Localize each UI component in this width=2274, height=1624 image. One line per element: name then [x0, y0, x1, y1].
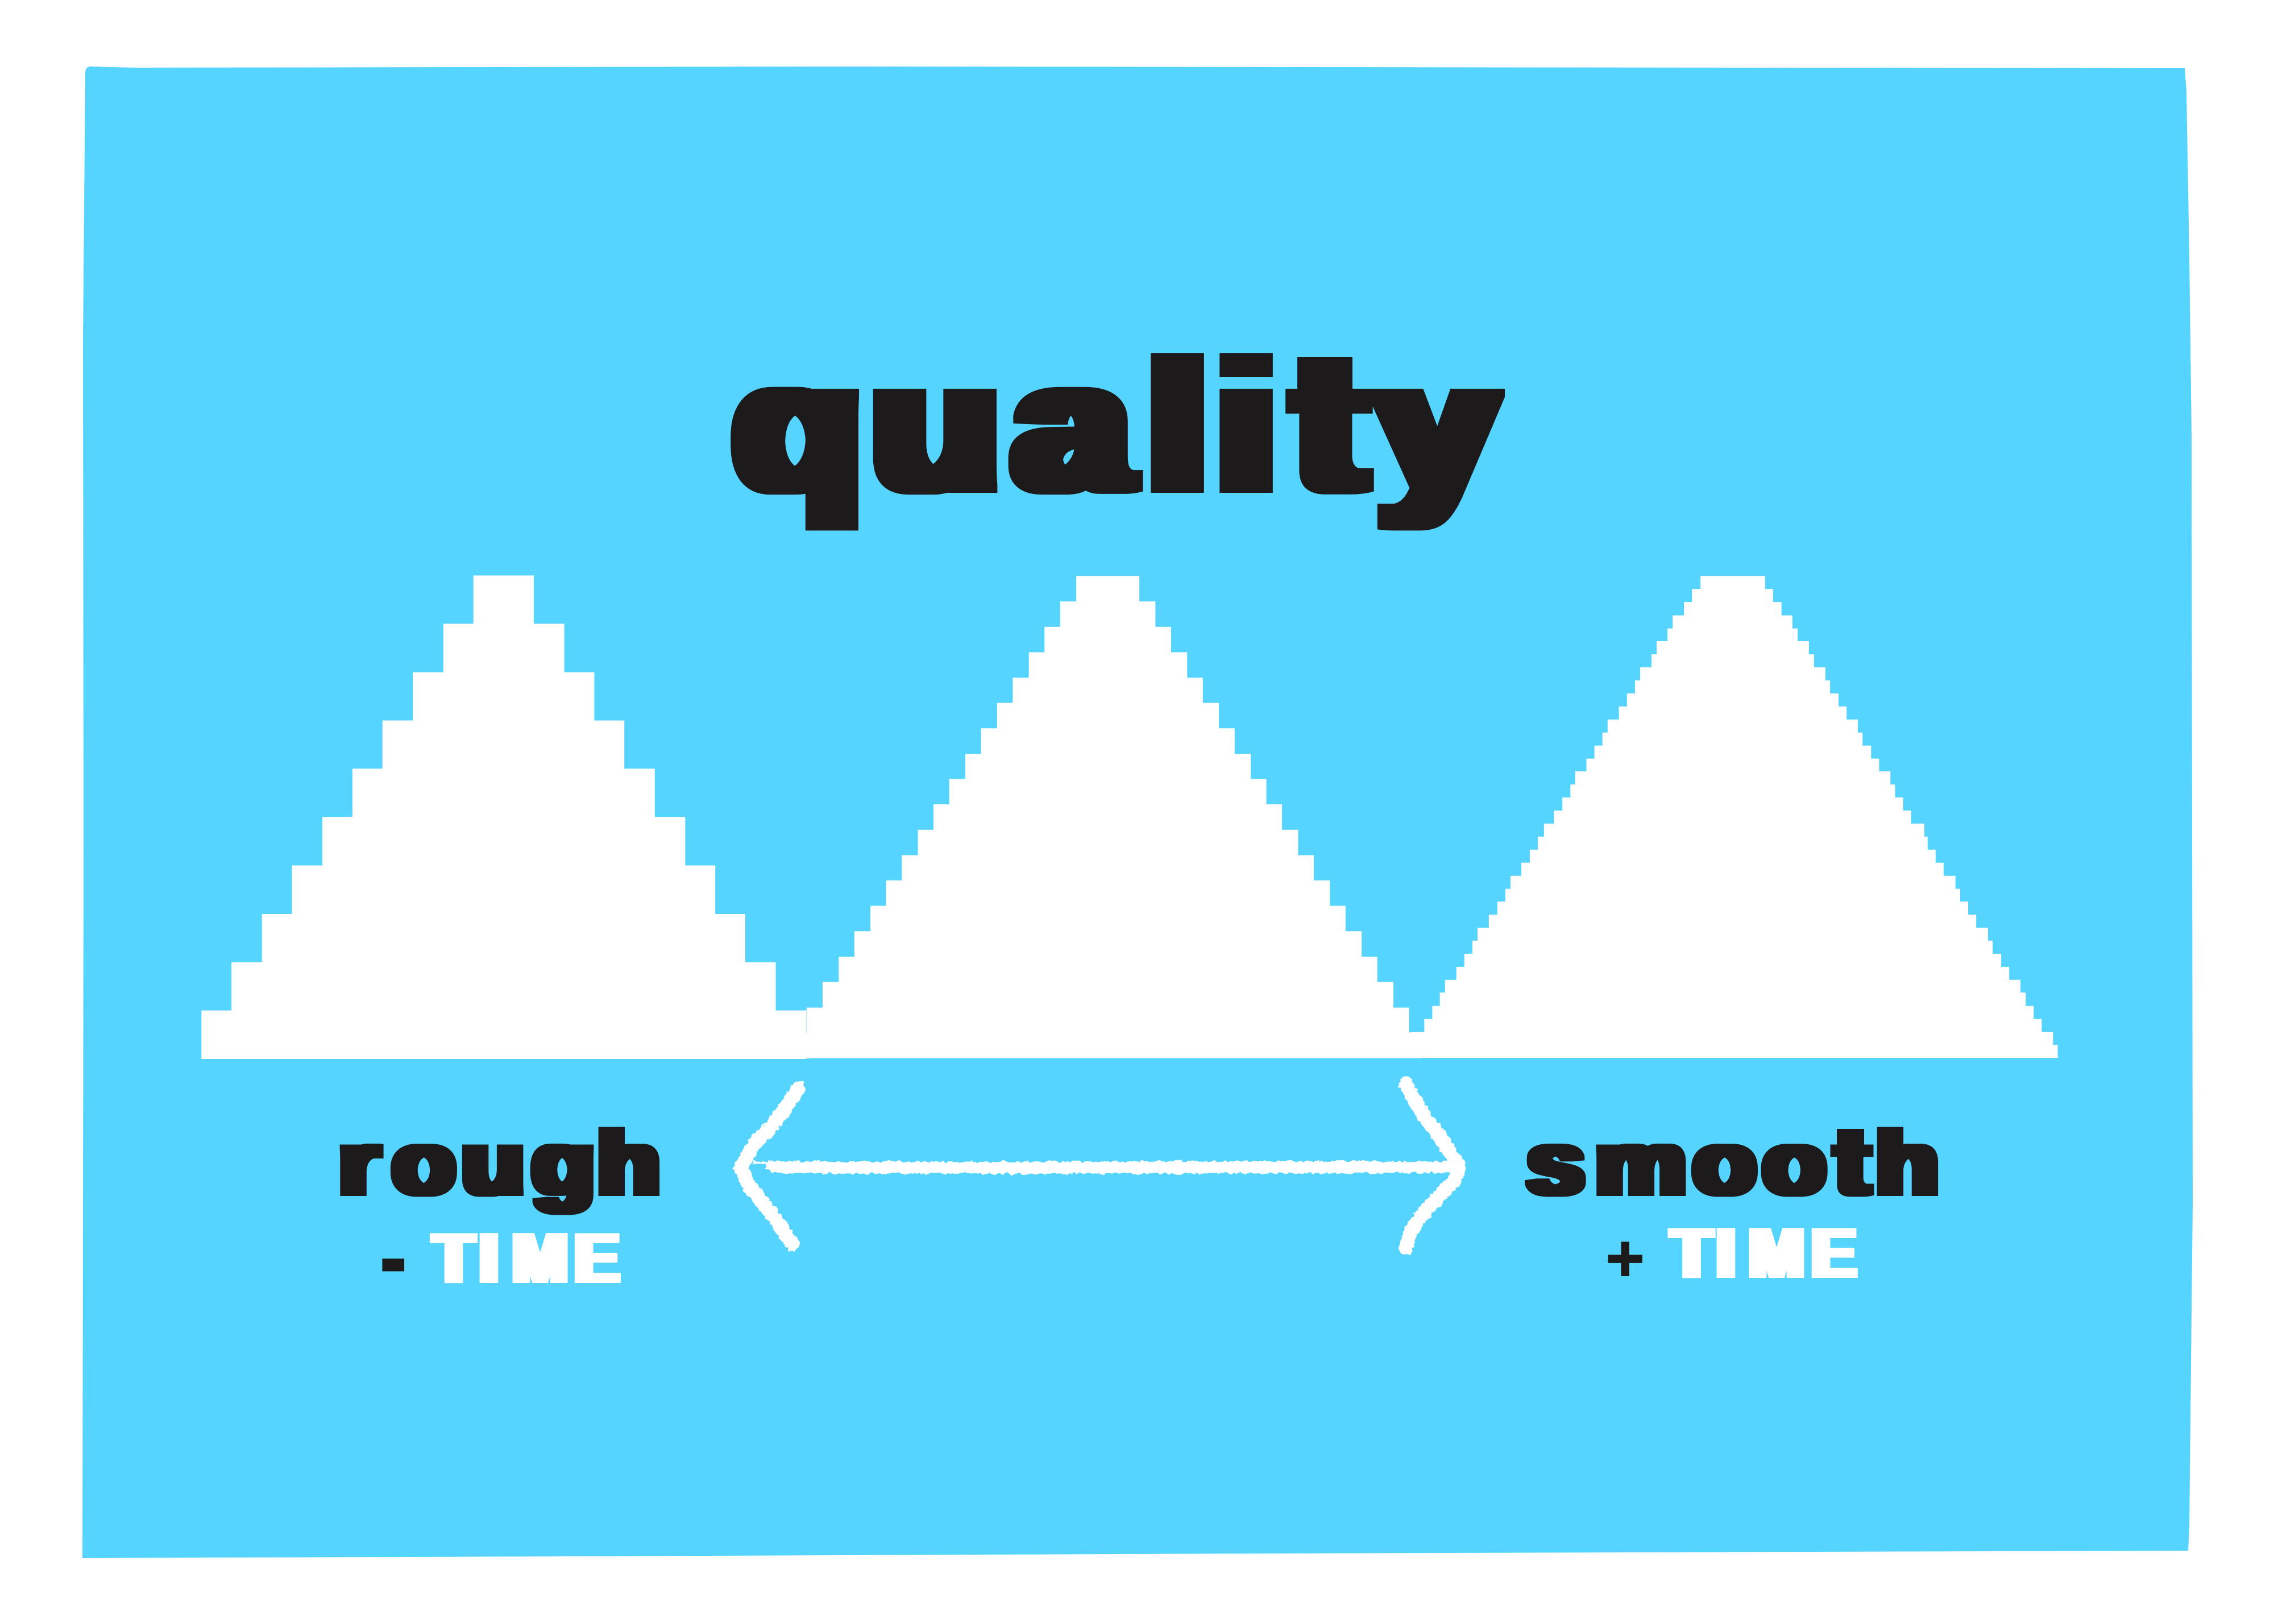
- mountain chart: three stepped triangles of growing smoothness: [201, 575, 2058, 1059]
- arrow head: right: [1406, 1083, 1459, 1248]
- mountain: smooth, fine steps: [1409, 576, 2058, 1058]
- arrow head: left: [741, 1089, 798, 1244]
- title: quality: [735, 325, 1495, 529]
- arrow shaft: [753, 1161, 1455, 1174]
- arrow: double-headed rough to smooth: [741, 1083, 1459, 1248]
- label: TIME under rough: TIME: [434, 1219, 619, 1297]
- label: minus sign: -: [381, 1228, 405, 1295]
- label: TIME under smooth: TIME: [1671, 1214, 1856, 1292]
- mountain: medium steps: [807, 576, 1421, 1058]
- label: rough: rough: [339, 1112, 659, 1213]
- label: plus sign: +: [1604, 1228, 1646, 1287]
- mountain: rough, coarse steps: [201, 575, 806, 1059]
- label: smooth: smooth: [1528, 1112, 1938, 1213]
